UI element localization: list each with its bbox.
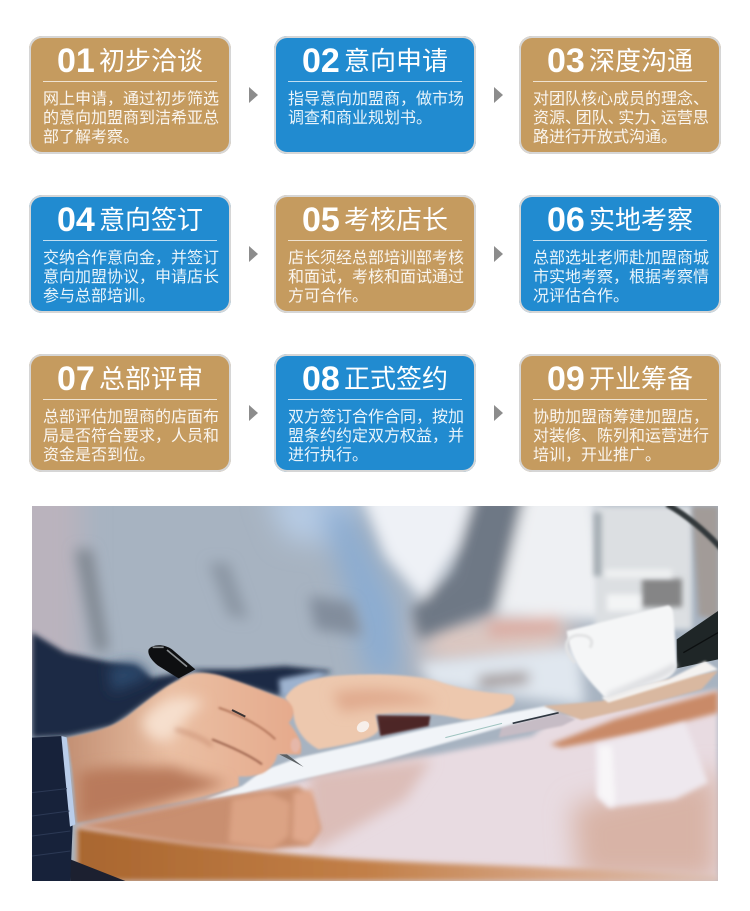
saucer bbox=[543, 661, 718, 720]
pen bbox=[148, 645, 304, 767]
panel: step 07 bbox=[29, 354, 231, 472]
arrow: step 01 to 02 bbox=[249, 87, 258, 103]
panel: step 08: 08 bbox=[302, 360, 340, 398]
panel: step 07: 07 bbox=[57, 360, 95, 398]
panel: step 08: 正式签约 bbox=[344, 359, 448, 396]
panel: step 07: 资金是否到位。 bbox=[43, 441, 155, 465]
panel: step 07: 局是否符合要求，人员和 bbox=[43, 422, 219, 446]
panel: step 05 bbox=[274, 195, 476, 313]
panel: step 03: 03 bbox=[547, 42, 585, 80]
panel: step 09 bbox=[519, 354, 721, 472]
arrow: step 05 to 06 bbox=[494, 246, 503, 262]
arrow: step 08 to 09 bbox=[494, 405, 503, 421]
panel: step 04: 意向签订 bbox=[99, 200, 203, 237]
reflected hand in table bbox=[77, 786, 320, 849]
document bbox=[205, 706, 575, 799]
panel: step 02: 02 bbox=[302, 42, 340, 80]
panel: step 09: 开业筹备 bbox=[589, 359, 693, 396]
arrow: step 04 to 05 bbox=[249, 246, 258, 262]
arrow: step 02 to 03 bbox=[494, 87, 503, 103]
panel: step 01: 的意向加盟商到洁希亚总 bbox=[43, 104, 219, 128]
panel: step 05: 和面试，考核和面试通过 bbox=[288, 263, 464, 287]
panel: step 01: 部了解考察。 bbox=[43, 123, 139, 147]
panel: step 06: 况评估合作。 bbox=[533, 282, 629, 306]
panel: step 05: 考核店长 bbox=[344, 200, 448, 237]
photo: hand signing a document at a meeting table bbox=[32, 506, 718, 881]
panel: step 04: 交纳合作意向金，并签订 bbox=[43, 244, 219, 268]
writing hand bbox=[67, 673, 301, 823]
panel: step 02: 意向申请 bbox=[344, 41, 448, 78]
background bbox=[32, 506, 718, 881]
panel: step 04: 意向加盟协议，申请店长 bbox=[43, 263, 219, 287]
coffee cup bbox=[566, 605, 677, 699]
panel: step 06: 总部选址老师赴加盟商城 bbox=[533, 244, 709, 268]
panel: step 03: 资源、团队、实力、运营思 bbox=[533, 104, 709, 128]
panel: step 08: 盟条约约定双方权益，并 bbox=[288, 422, 464, 446]
panel: step 09: 对装修、陈列和运营进行 bbox=[533, 422, 709, 446]
panel: step 07: 总部评审 bbox=[99, 359, 203, 396]
panel: step 03 bbox=[519, 36, 721, 154]
cable bbox=[667, 504, 722, 549]
panel: step 01: 网上申请，通过初步筛选 bbox=[43, 85, 219, 109]
panel: step 06 bbox=[519, 195, 721, 313]
water glass bbox=[594, 506, 719, 629]
panel: step 02: 调查和商业规划书。 bbox=[288, 104, 432, 128]
panel: step 01: 01 bbox=[57, 42, 95, 80]
panel: step 02: 指导意向加盟商，做市场 bbox=[288, 85, 464, 109]
dark sleeve bbox=[32, 633, 332, 738]
cuff and lower sleeve bbox=[32, 736, 75, 881]
arrow: step 07 to 08 bbox=[249, 405, 258, 421]
panel: step 08: 进行执行。 bbox=[288, 441, 368, 465]
panel: step 05: 方可合作。 bbox=[288, 282, 368, 306]
panel: step 06: 市实地考察，根据考察情 bbox=[533, 263, 709, 287]
table surface bbox=[70, 689, 718, 881]
panel: step 09: 协助加盟商筹建加盟店， bbox=[533, 403, 709, 427]
phone bbox=[677, 611, 718, 668]
panel: step 01 bbox=[29, 36, 231, 154]
panel: step 08: 双方签订合作合同，按加 bbox=[288, 403, 464, 427]
panel: step 07: 总部评估加盟商的店面布 bbox=[43, 403, 219, 427]
panel: step 05: 05 bbox=[302, 201, 340, 239]
far hand bbox=[285, 674, 515, 749]
panel: step 09: 培训，开业推广。 bbox=[533, 441, 661, 465]
panel: step 04 bbox=[29, 195, 231, 313]
panel: step 05: 店长须经总部培训部考核 bbox=[288, 244, 464, 268]
panel: step 08 bbox=[274, 354, 476, 472]
panel: step 01: 初步洽谈 bbox=[99, 41, 203, 78]
panel: step 04: 参与总部培训。 bbox=[43, 282, 155, 306]
panel: step 09: 09 bbox=[547, 360, 585, 398]
panel: step 04: 04 bbox=[57, 201, 95, 239]
panel: step 03: 对团队核心成员的理念、 bbox=[533, 85, 709, 109]
panel: step 06: 实地考察 bbox=[589, 200, 693, 237]
panel: step 03: 深度沟通 bbox=[589, 41, 693, 78]
panel: step 06: 06 bbox=[547, 201, 585, 239]
panel: step 02 bbox=[274, 36, 476, 154]
panel: step 03: 路进行开放式沟通。 bbox=[533, 123, 677, 147]
